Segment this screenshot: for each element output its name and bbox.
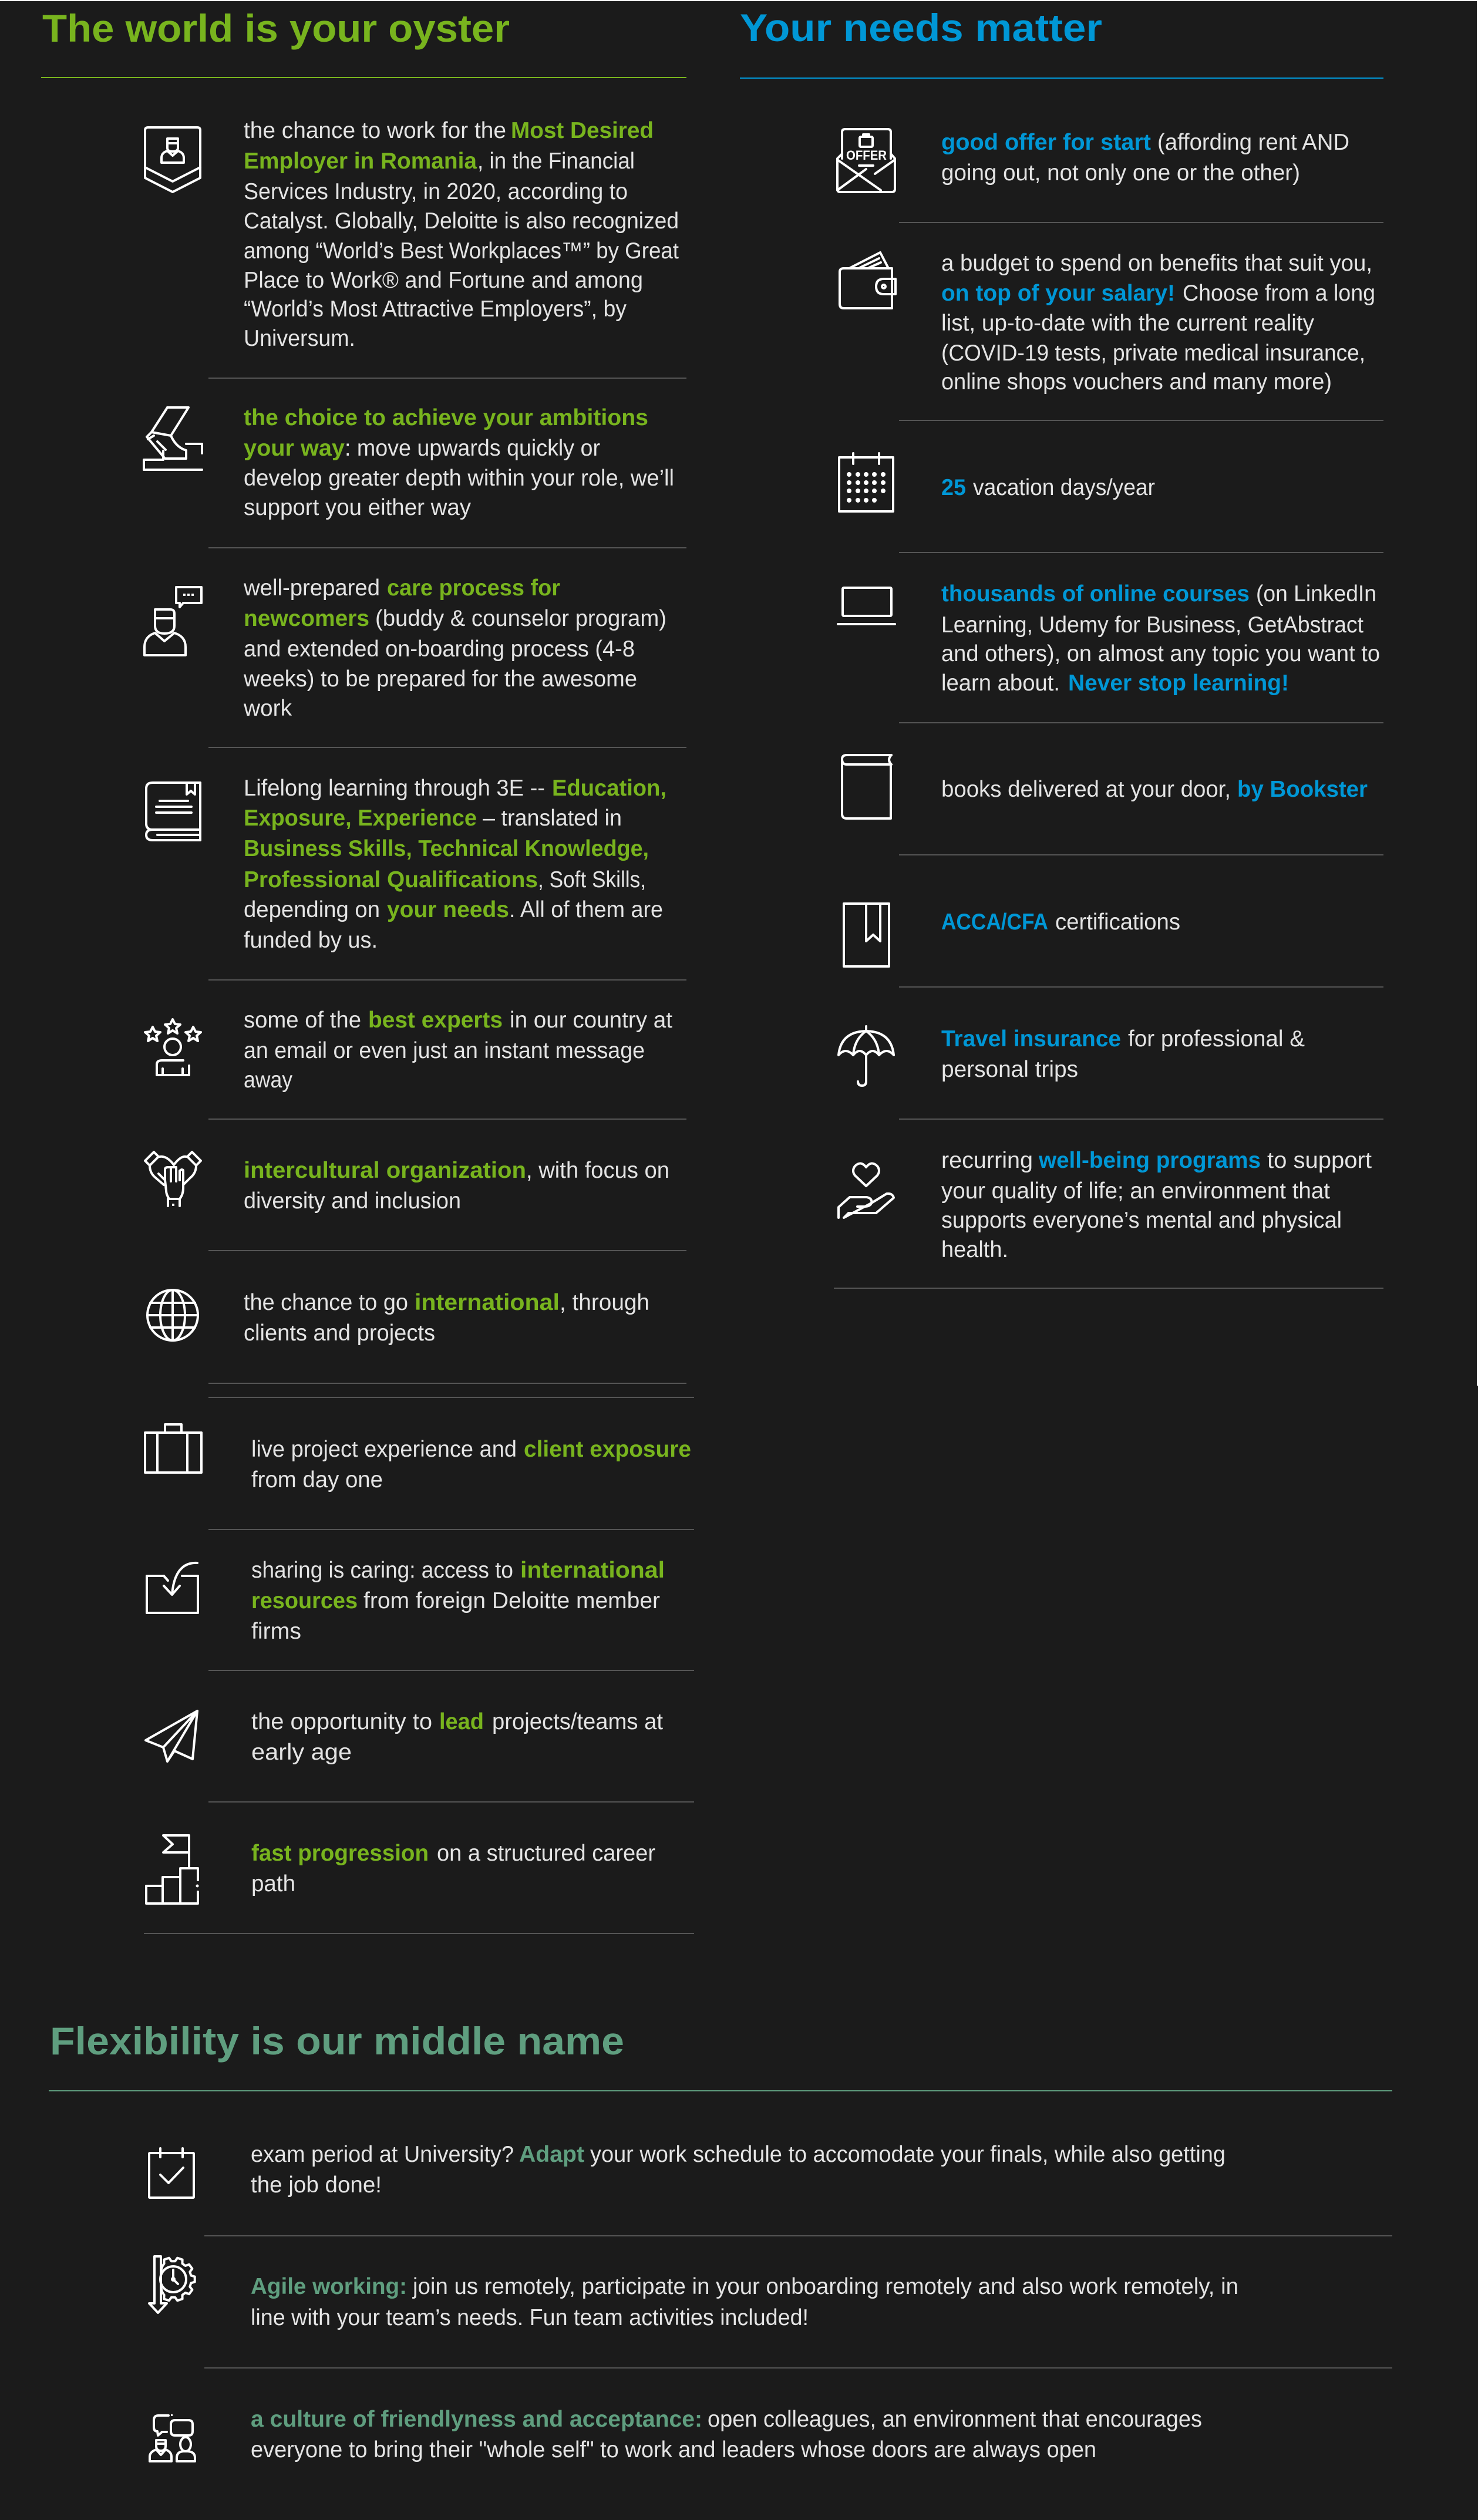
- text: certifications: [941, 909, 1180, 935]
- text: best experts: in our country at: [510, 1008, 672, 1033]
- item: best experts: [145, 1008, 672, 1093]
- text: care process: (buddy & counselor program): [375, 606, 666, 631]
- text: lifelong learning: Lifelong learning through 3E --: [244, 776, 545, 801]
- text: culture of acceptance: a culture of friendlyness and acceptance:: [251, 2407, 702, 2432]
- text: intercultural organization: [244, 1158, 669, 1214]
- icon: umbrella: [839, 1026, 894, 1086]
- text: care process: newcomers: [244, 606, 369, 631]
- text: most desired employer: Most Desired: [511, 118, 654, 143]
- text: your ambitions: the choice to achieve your ambitions: [244, 405, 648, 430]
- text: benefits budget: a budget to spend on benefits that suit you,: [941, 251, 1372, 276]
- text: adapt schedule: your work schedule to accomodate your finals, while also getting: [590, 2142, 1226, 2167]
- text: good offer: good offer for start: [941, 130, 1151, 155]
- text: agile working: Agile working:: [251, 2274, 407, 2299]
- text: lifelong learning: Education,: [552, 776, 666, 801]
- text: lifelong learning: – translated in: [483, 806, 622, 831]
- icon: calendar check: [149, 2148, 194, 2198]
- text: fast progression: fast progression: [251, 1841, 429, 1866]
- text: intercultural organization: intercultural organization: [244, 1158, 526, 1183]
- text: good offer: [941, 130, 1349, 186]
- item: well-being: [839, 1148, 1372, 1262]
- icon: briefcase: [145, 1424, 201, 1473]
- icon: offer envelope: [837, 129, 895, 192]
- text: your ambitions: support you either way: [244, 495, 471, 520]
- text: international resources: sharing is caring: access to: [251, 1558, 513, 1583]
- icon: gear with clock and arrow: [149, 2256, 195, 2313]
- item: good offer: [837, 129, 1349, 192]
- item: vacation days: [839, 453, 1155, 511]
- text: travel insurance: personal trips: [941, 1057, 1078, 1082]
- text: lead projects: early age: [251, 1740, 352, 1765]
- text: lead projects: projects/teams at: [492, 1709, 663, 1734]
- item: care process: [144, 575, 666, 721]
- icon: badge with person: [145, 127, 200, 192]
- icon: hand holding heart: [839, 1163, 894, 1218]
- item: culture of acceptance: [150, 2407, 1202, 2462]
- text: most desired employer: [244, 118, 679, 351]
- icon: folder with arrow: [147, 1563, 198, 1613]
- text: international resources: firms: [251, 1619, 301, 1644]
- text: international resources: international: [520, 1558, 665, 1583]
- text: best experts: an email or even just an instant message: [244, 1038, 645, 1063]
- text: good offer: going out, not only one or the other): [941, 160, 1300, 186]
- text: your ambitions: develop greater depth within your role, we’ll: [244, 466, 674, 491]
- item: travel insurance: [839, 1026, 1305, 1086]
- item: client exposure: [145, 1424, 691, 1493]
- text: care process: and extended on-boarding process (4-8: [244, 636, 635, 662]
- text: most desired employer: among “World’s Best Workplaces™” by Great: [244, 238, 679, 264]
- text: benefits budget: Choose from a long: [1183, 281, 1375, 306]
- text: well-being: your quality of life; an environment that: [941, 1178, 1330, 1204]
- text: lifelong learning: , Soft Skills,: [538, 867, 646, 892]
- text: lead projects: [251, 1709, 663, 1765]
- item: online courses: [838, 581, 1380, 696]
- text: intercultural organization: , with focus on: [526, 1158, 669, 1183]
- text: care process: work: [243, 696, 292, 721]
- text: adapt schedule: Adapt: [519, 2142, 584, 2167]
- text: lifelong learning: Exposure, Experience: [244, 806, 477, 831]
- text: client exposure: [251, 1437, 691, 1493]
- text: most desired employer: Services Industry, in 2020, according to: [244, 179, 628, 204]
- icon: wallet: [840, 252, 895, 308]
- text: best experts: away: [244, 1067, 292, 1093]
- text: international resources: from foreign Deloitte member: [363, 1588, 660, 1613]
- text: benefits budget: list, up-to-date with the current reality: [941, 311, 1314, 336]
- text: online courses: Learning, Udemy for Business, GetAbstract: [941, 612, 1363, 638]
- text: go international: clients and projects: [244, 1320, 435, 1346]
- text: lead projects: lead: [439, 1709, 484, 1734]
- text: care process: [243, 575, 666, 721]
- text: agile working: join us remotely, participate in your onboarding remotely and also work remotely, in: [412, 2274, 1238, 2299]
- text: go international: , through: [560, 1290, 649, 1315]
- icon: calendar: [839, 453, 893, 511]
- text: fast progression: [251, 1841, 655, 1896]
- text: best experts: [244, 1008, 672, 1093]
- text: benefits budget: (COVID-19 tests, private medical insurance,: [941, 341, 1365, 366]
- heading: your needs matter: Your needs matter: [740, 6, 1102, 49]
- item: lifelong learning: [146, 776, 666, 953]
- text: agile working: [251, 2274, 1238, 2330]
- text: most desired employer: the chance to work for the: [244, 118, 506, 143]
- text: culture of acceptance: everyone to bring their "whole self" to work and leaders whose doors are always open: [251, 2437, 1096, 2462]
- text: go international: [244, 1290, 649, 1346]
- item: fast progression: [146, 1835, 655, 1904]
- text: well-being: to support: [1267, 1148, 1372, 1173]
- text: your ambitions: : move upwards quickly or: [345, 436, 600, 461]
- text: most desired employer: Catalyst. Globally, Deloitte is also recognized: [244, 208, 679, 234]
- text: online courses: (on LinkedIn: [1256, 581, 1376, 607]
- item: agile working: [149, 2256, 1238, 2330]
- icon: person with stars: [145, 1019, 201, 1075]
- text: most desired employer: , in the Financial: [477, 149, 635, 174]
- icon: foot on step: [144, 407, 202, 470]
- text: intercultural organization: diversity and inclusion: [244, 1188, 461, 1214]
- text: lifelong learning: Professional Qualifications: [244, 867, 538, 892]
- text: benefits budget: [941, 251, 1375, 395]
- heading: the world is your oyster: The world is your oyster: [42, 6, 510, 50]
- text: online courses: learn about.: [941, 671, 1060, 696]
- text: books: books delivered at your door,: [941, 777, 1231, 802]
- item: adapt schedule: [149, 2142, 1226, 2198]
- item: international resources: [147, 1558, 665, 1644]
- text: adapt schedule: the job done!: [251, 2172, 382, 2198]
- text: lead projects: the opportunity to: [251, 1709, 432, 1734]
- item: your ambitions: [144, 405, 674, 520]
- text: offer label in icon: OFFER: [846, 148, 887, 163]
- heading: flexibility is our middle name: Flexibility is our middle name: [50, 2019, 624, 2063]
- text: lifelong learning: Business Skills, Technical Knowledge,: [244, 836, 649, 861]
- text: vacation days: 25: [941, 475, 966, 500]
- icon: globe: [147, 1290, 198, 1340]
- text: benefits budget: on top of your salary!: [941, 281, 1175, 306]
- text: online courses: Never stop learning!: [1068, 671, 1289, 696]
- text: lifelong learning: depending on: [244, 897, 380, 922]
- text: culture of acceptance: [251, 2407, 1202, 2462]
- text: your ambitions: your way: [244, 436, 345, 461]
- text: culture of acceptance: open colleagues, an environment that encourages: [708, 2407, 1202, 2432]
- text: vacation days: vacation days/year: [973, 475, 1155, 500]
- text: lifelong learning: funded by us.: [244, 928, 378, 953]
- text: client exposure: from day one: [251, 1467, 383, 1493]
- text: online courses: thousands of online courses: [941, 581, 1250, 607]
- panel: your needs matter: [740, 6, 1383, 1289]
- text: fast progression: path: [251, 1871, 295, 1896]
- text: certifications: ACCA/CFA: [941, 909, 1048, 935]
- icon: joined hands: [145, 1152, 201, 1206]
- text: care process: care process for: [387, 575, 560, 601]
- icon: book: [842, 755, 891, 818]
- icon: notebook with ribbon: [844, 904, 889, 966]
- text: travel insurance: for professional &: [1128, 1026, 1305, 1052]
- text: best experts: some of the: [244, 1008, 361, 1033]
- icon: steps with flag: [146, 1835, 198, 1904]
- item: lead projects: [146, 1709, 663, 1765]
- text: care process: weeks) to be prepared for the awesome: [243, 666, 637, 692]
- item: most desired employer: [145, 118, 679, 351]
- text: most desired employer: Employer in Romania: [244, 149, 477, 174]
- text: books: by Bookster: [1237, 777, 1368, 802]
- text: go international: the chance to go: [244, 1290, 408, 1315]
- text: client exposure: live project experience and: [251, 1437, 517, 1462]
- text: well-being: [941, 1148, 1372, 1262]
- item: benefits budget: [840, 251, 1375, 395]
- icon: book with bookmark: [146, 783, 200, 840]
- text: lifelong learning: . All of them are: [509, 897, 663, 922]
- text: fast progression: on a structured career: [437, 1841, 655, 1866]
- text: most desired employer: Universum.: [244, 326, 355, 351]
- text: benefits budget: online shops vouchers and many more): [941, 369, 1332, 395]
- item: books: [842, 755, 1368, 818]
- text: agile working: line with your team’s needs. Fun team activities included!: [251, 2305, 809, 2330]
- panel: the world is your oyster: [41, 6, 694, 1934]
- text: international resources: resources: [251, 1588, 358, 1613]
- item: go international: [147, 1290, 649, 1346]
- text: well-being: supports everyone’s mental and physical: [941, 1208, 1342, 1233]
- text: well-being: health.: [941, 1237, 1008, 1262]
- icon: laptop: [838, 588, 895, 624]
- text: your ambitions: [244, 405, 674, 520]
- text: good offer: (affording rent AND: [1157, 130, 1349, 155]
- text: lifelong learning: your needs: [387, 897, 509, 922]
- text: travel insurance: [941, 1026, 1305, 1082]
- text: books: [941, 777, 1368, 802]
- text: adapt schedule: [251, 2142, 1226, 2198]
- item: intercultural organization: [145, 1152, 669, 1214]
- text: well-being: well-being programs: [1038, 1148, 1261, 1173]
- item: certifications: [844, 904, 1180, 966]
- icon: paper plane: [146, 1711, 197, 1761]
- text: adapt schedule: exam period at University?: [251, 2142, 514, 2167]
- text: care process: well-prepared: [243, 575, 380, 601]
- text: travel insurance: Travel insurance: [941, 1026, 1121, 1052]
- text: most desired employer: “World’s Most Attractive Employers”, by: [244, 297, 627, 322]
- text: most desired employer: Place to Work® and Fortune and among: [244, 268, 643, 293]
- text: international resources: [251, 1558, 665, 1644]
- text: online courses: [941, 581, 1380, 696]
- text: well-being: recurring: [941, 1148, 1033, 1173]
- text: online courses: and others), on almost any topic you want to: [941, 641, 1380, 666]
- text: lifelong learning: [244, 776, 666, 953]
- text: client exposure: client exposure: [524, 1437, 691, 1462]
- icon: two people talking: [150, 2414, 195, 2461]
- panel: flexibility is our middle name: [49, 2019, 1392, 2462]
- text: certifications: certifications: [1055, 909, 1180, 935]
- text: best experts: best experts: [368, 1008, 503, 1033]
- icon: person with chat bubble: [144, 587, 201, 655]
- text: go international: international: [415, 1290, 560, 1315]
